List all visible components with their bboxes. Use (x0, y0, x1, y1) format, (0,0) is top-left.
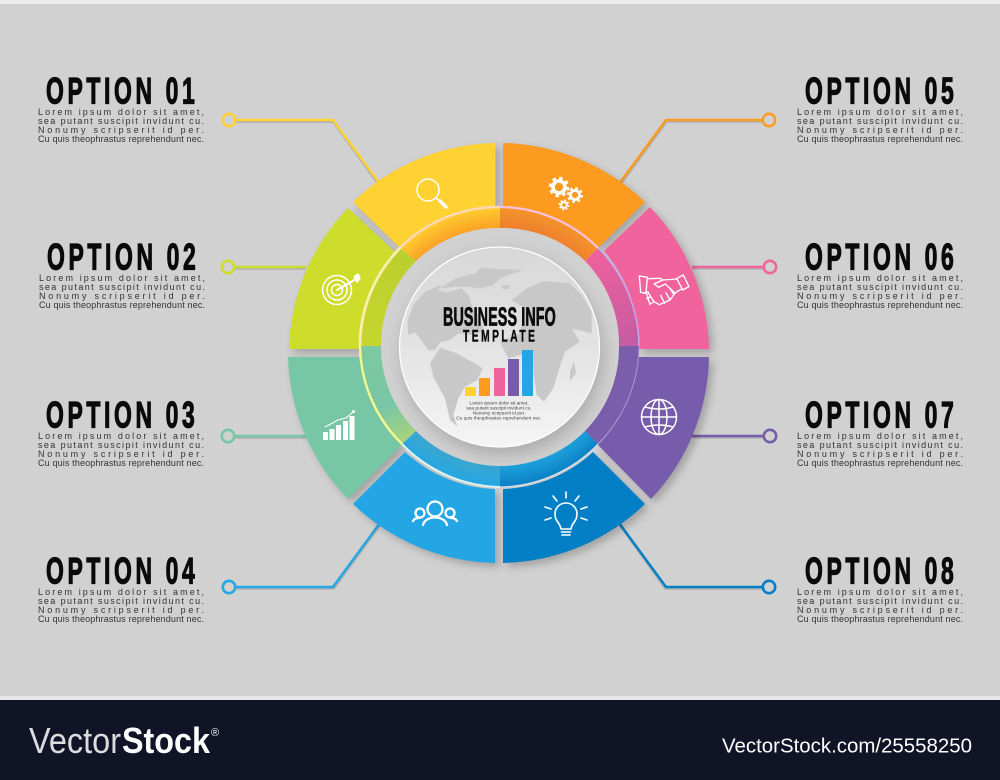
text block: option 01: Cu quis theophrastus reprehendunt nec. (38, 134, 204, 144)
connector: option 03 (222, 430, 306, 444)
panel: segment 8 dark blue (503, 452, 645, 563)
text block: option 02: Cu quis theophrastus reprehendunt nec. (39, 300, 205, 310)
footer image id: VectorStock.com/25558250 (722, 736, 972, 758)
connector: option 05 (619, 114, 776, 184)
text block: option 08: OPTION 08 (805, 550, 954, 592)
connector: option 07 (692, 430, 776, 444)
panel: segment 4 blue (353, 452, 495, 563)
small bar chart (465, 350, 533, 396)
text block: option 01: Nonumy scripserit id per. (38, 125, 204, 135)
text block: option 07: sea putant suscipit invidunt cu. (797, 440, 963, 450)
connector: option 02 (222, 261, 306, 274)
icon: gears (550, 178, 582, 210)
text block: option 05 (797, 70, 963, 144)
text block: option 08: sea putant suscipit invidunt cu. (797, 596, 963, 606)
icon: rising bar chart (323, 410, 355, 440)
footer bar (0, 700, 1000, 780)
text block: option 07: Cu quis theophrastus reprehendunt nec. (797, 458, 963, 468)
center caption: Cu quis theophrastus reprehendunt nec. (456, 416, 542, 422)
center caption (456, 400, 542, 422)
text block: option 03 (38, 394, 204, 468)
text block: option 03: sea putant suscipit invidunt cu. (38, 440, 204, 450)
text block: option 05: Lorem ipsum dolor sit amet, (797, 107, 963, 117)
world map (407, 268, 592, 427)
footer logo: Stock (122, 720, 211, 761)
text block: option 06 (797, 236, 963, 310)
center caption: Lorem ipsum dolor sit amet, (469, 400, 529, 406)
text block: option 01: sea putant suscipit invidunt cu. (38, 116, 204, 126)
connector: option 04 (222, 523, 380, 594)
panel: segment 5 orange (503, 143, 645, 248)
panel: segment 3 teal (288, 357, 402, 499)
text block: option 03: Cu quis theophrastus reprehendunt nec. (38, 458, 204, 468)
text block: option 07 (797, 394, 963, 468)
footer logo (29, 720, 219, 761)
text block: option 04: Lorem ipsum dolor sit amet, (38, 587, 204, 597)
panel: segment 6 pink (604, 207, 709, 349)
icon: light bulb (545, 492, 587, 535)
text block: option 07: OPTION 07 (805, 394, 954, 436)
text block: option 06: Nonumy scripserit id per. (797, 291, 963, 301)
center caption: sea putant suscipit invidunt cu. (466, 406, 532, 412)
text block: option 06: Cu quis theophrastus reprehendunt nec. (797, 300, 963, 310)
center title (443, 303, 556, 345)
text block: option 02: Nonumy scripserit id per. (39, 291, 205, 301)
panel: segment 2 lime (289, 208, 395, 349)
icon: three people (413, 502, 457, 525)
icon: handshake (639, 275, 689, 305)
center disk (400, 247, 600, 447)
text block: option 04: OPTION 04 (46, 550, 195, 592)
icon: globe (642, 400, 676, 434)
connector: option 01 (222, 114, 380, 184)
text block: option 05: Cu quis theophrastus reprehendunt nec. (797, 134, 963, 144)
text block: option 05: OPTION 05 (805, 70, 954, 112)
text block: option 04: Nonumy scripserit id per. (38, 605, 204, 615)
center title: BUSINESS INFO (443, 303, 556, 332)
text block: option 03: Nonumy scripserit id per. (38, 449, 204, 459)
text block: option 01 (38, 70, 204, 144)
inner ring (360, 207, 639, 487)
panel: segment 7 purple (598, 357, 709, 499)
text block: option 08: Cu quis theophrastus reprehendunt nec. (797, 614, 963, 624)
text block: option 02 (39, 236, 205, 310)
text block: option 07: Lorem ipsum dolor sit amet, (797, 431, 963, 441)
text block: option 08: Lorem ipsum dolor sit amet, (797, 587, 963, 597)
text block: option 04: sea putant suscipit invidunt cu. (38, 596, 204, 606)
center title: TEMPLATE (463, 327, 535, 345)
footer logo: ® (211, 727, 219, 739)
connector: option 06 (692, 261, 776, 274)
text block: option 05: sea putant suscipit invidunt cu. (797, 116, 963, 126)
text block: option 03: Lorem ipsum dolor sit amet, (38, 431, 204, 441)
text block: option 08 (797, 550, 963, 624)
connector: option 08 (619, 523, 776, 594)
text block: option 01: Lorem ipsum dolor sit amet, (38, 107, 204, 117)
panel: segment 1 yellow (353, 143, 496, 248)
center caption: Nonumy scripserit id per. (473, 410, 525, 416)
text block: option 05: Nonumy scripserit id per. (797, 125, 963, 135)
text block: option 01: OPTION 01 (46, 70, 195, 112)
text block: option 03: OPTION 03 (46, 394, 195, 436)
text block: option 06: sea putant suscipit invidunt cu. (797, 282, 963, 292)
footer logo: Vector (29, 720, 121, 761)
icon: magnifier (417, 179, 446, 207)
text block: option 04: Cu quis theophrastus reprehendunt nec. (38, 614, 204, 624)
text block: option 08: Nonumy scripserit id per. (797, 605, 963, 615)
text block: option 02: OPTION 02 (47, 236, 196, 278)
text block: option 06: OPTION 06 (805, 236, 954, 278)
text block: option 02: sea putant suscipit invidunt cu. (39, 282, 205, 292)
text block: option 02: Lorem ipsum dolor sit amet, (39, 273, 205, 283)
text block: option 04 (38, 550, 204, 624)
icon: target with arrow (322, 274, 360, 304)
text block: option 07: Nonumy scripserit id per. (797, 449, 963, 459)
text block: option 06: Lorem ipsum dolor sit amet, (797, 273, 963, 283)
